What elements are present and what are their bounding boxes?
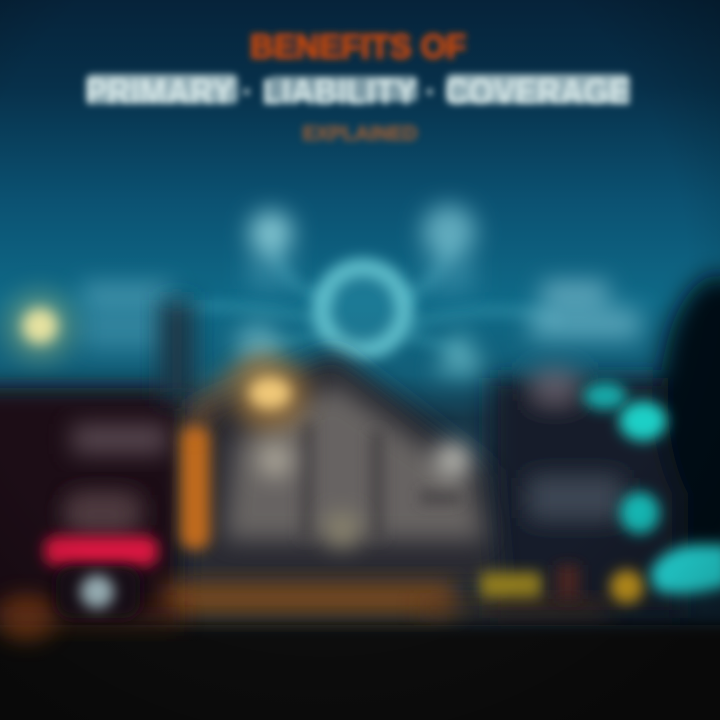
icon: teal glowing accents: [583, 382, 720, 594]
connector lines: [170, 240, 560, 350]
house stone texture: [300, 420, 460, 540]
icon: moon: [4, 290, 76, 362]
heading: subtitle: EXPLAINED: [302, 123, 418, 145]
icon: porch light: [232, 355, 308, 431]
icon: red car: [44, 495, 158, 618]
icon: lower right node: [434, 328, 486, 374]
building: left dark brick wall: [0, 300, 194, 628]
icon: central ring: [319, 265, 407, 353]
icon: top left node: [248, 211, 294, 289]
icon: top right node: [422, 205, 476, 292]
house window right: [435, 442, 471, 478]
building: right dark structure: [490, 275, 720, 618]
house window bottom: [325, 513, 359, 547]
ground: road and glow: [0, 584, 720, 720]
heading: kicker: BENEFITS OF: [250, 28, 466, 66]
text block: right label: [530, 282, 640, 340]
heading: main title: PRIMARY · LIABILITY · COVERAGE: [86, 71, 630, 112]
diagram: central ring with connected icons: [82, 205, 640, 374]
icon: lower left node: [236, 323, 280, 367]
house window left: [258, 443, 292, 477]
house: central illuminated house: [180, 352, 500, 590]
text block: left label: [82, 284, 172, 350]
icon: yellow lights: [480, 565, 644, 604]
